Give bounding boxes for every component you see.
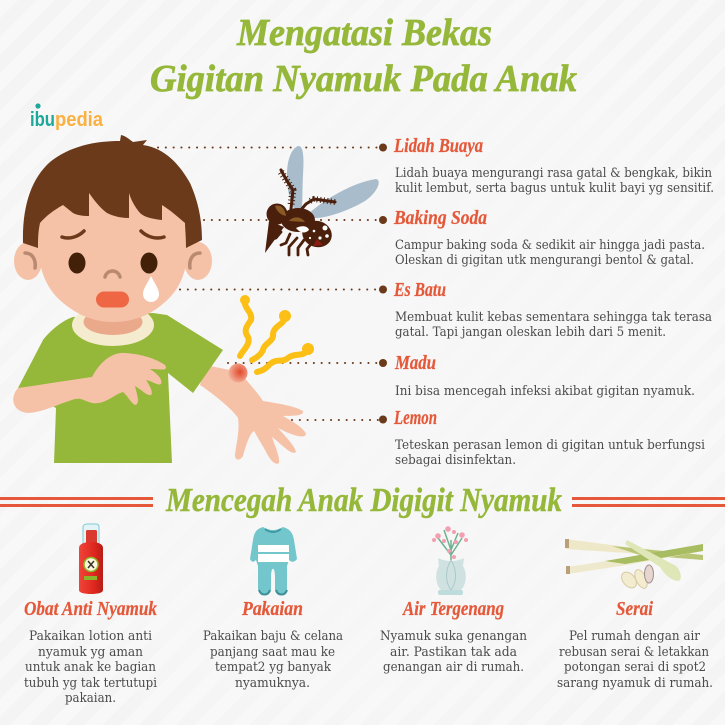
item: Lemon: sebagai disinfektan.	[395, 453, 516, 468]
panel: Pakaian: panjang saat mau ke	[210, 645, 335, 660]
itch squiggles	[240, 295, 314, 372]
illustration: boy	[13, 135, 306, 464]
item: Madu: Ini bisa mencegah infeksi akibat gigitan nyamuk.	[395, 384, 695, 399]
item: Baking Soda: Baking Soda	[393, 207, 487, 229]
boy: ears	[14, 242, 212, 280]
panel: Obat Anti Nyamuk: untuk anak ke bagian	[25, 660, 156, 675]
dotted connector lines	[158, 148, 378, 420]
section heading: Mencegah Anak Digigit Nyamuk	[0, 482, 725, 519]
panel: Air Tergenang: Air Tergenang	[401, 598, 504, 620]
panel: Obat Anti Nyamuk	[24, 524, 157, 706]
panel: Obat Anti Nyamuk: nyamuk yg aman	[38, 645, 143, 660]
panel: Serai: potongan serai di spot2	[564, 660, 706, 675]
item: Es Batu: gatal. Tapi jangan oleskan lebih dari 5 menit.	[395, 325, 666, 340]
boy: tear	[143, 276, 159, 302]
item: Es Batu: Es Batu	[393, 279, 446, 301]
boy: collar	[72, 304, 154, 346]
boy: eyes and brows	[62, 231, 164, 274]
panel: Pakaian: Pakaikan baju & celana	[203, 629, 343, 644]
panel: Pakaian: nyamuknya.	[235, 676, 310, 691]
boy: mouth	[96, 292, 129, 308]
item: Lidah Buaya: Lidah Buaya	[393, 135, 483, 157]
item: Madu: Madu	[394, 352, 436, 374]
panel: Obat Anti Nyamuk: Pakaikan lotion anti	[29, 629, 152, 644]
item: Lemon	[379, 407, 705, 468]
boy: raised arm	[13, 353, 166, 413]
panel: Serai	[557, 539, 713, 691]
item: Lemon: Lemon	[393, 407, 437, 429]
title	[150, 12, 577, 100]
panel: Obat Anti Nyamuk: tubuh yg tak tertutupi	[24, 676, 157, 691]
boy: shirt	[18, 313, 223, 463]
panel: Air Tergenang: air. Pastikan tak ada	[390, 645, 517, 660]
boy: hair	[23, 135, 202, 248]
logo: ibupedia: ibu	[30, 109, 55, 131]
logo: ibupedia: pedia	[55, 109, 104, 131]
panel: Air Tergenang: Nyamuk suka genangan	[380, 629, 527, 644]
panel: Pakaian: Pakaian	[241, 598, 303, 620]
section heading: Mencegah Anak Digigit Nyamuk: Mencegah Anak Digigit Nyamuk	[165, 482, 562, 519]
title: Mengatasi Bekas	[236, 12, 492, 54]
boy: extended arm and hand	[200, 365, 306, 464]
item: Es Batu	[379, 279, 712, 340]
panel: Pakaian	[203, 527, 343, 691]
logo: ibupedia	[30, 103, 104, 131]
item: Lidah Buaya	[379, 135, 714, 196]
panel: Obat Anti Nyamuk: pakaian.	[65, 691, 116, 706]
icon: baby onesie	[250, 527, 297, 595]
illustration: mosquito	[265, 146, 379, 255]
panel: Obat Anti Nyamuk: Obat Anti Nyamuk	[24, 598, 157, 620]
boy: face	[38, 190, 188, 322]
title: Gigitan Nyamuk Pada Anak	[150, 58, 577, 100]
panel: Air Tergenang	[380, 526, 527, 675]
icon: vase with flowers	[432, 526, 468, 595]
boy: neck	[84, 309, 142, 335]
item: Baking Soda	[379, 207, 705, 268]
boy: bite mark	[228, 364, 248, 382]
panel: Air Tergenang: genangan air di rumah.	[383, 660, 524, 675]
item: Madu	[379, 352, 695, 399]
panel: Serai: Pel rumah dengan air	[569, 629, 701, 644]
icon: spray can	[79, 524, 103, 594]
boy: nose	[105, 271, 120, 277]
panel: Pakaian: tempat2 yg banyak	[215, 660, 332, 675]
panel: Serai: Serai	[616, 598, 653, 620]
icon: lemongrass	[565, 539, 703, 591]
